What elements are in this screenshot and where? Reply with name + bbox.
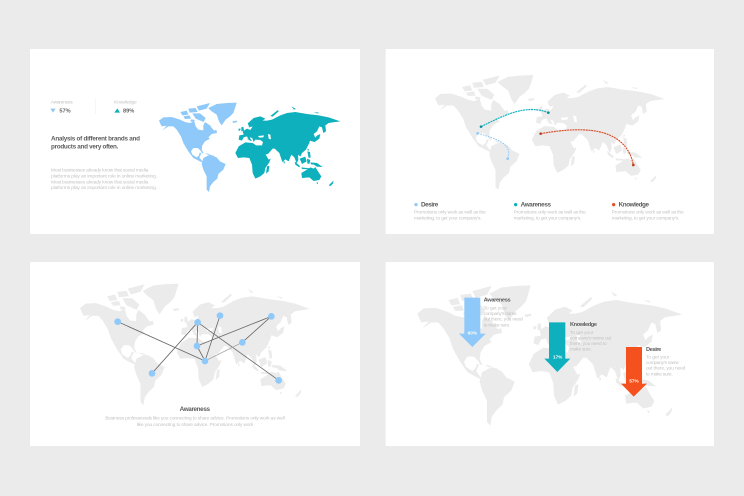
route: knowledge bbox=[539, 130, 635, 166]
arrow: knowledge bbox=[544, 322, 570, 372]
label: awareness: to make sure. bbox=[484, 322, 510, 328]
label: desire: company's name bbox=[646, 360, 679, 366]
stat: knowledge: 89% bbox=[123, 109, 134, 115]
panel: arrows bbox=[386, 262, 714, 446]
body text: Business professionals like you connecting to share advice. Promotions only work as well bbox=[105, 415, 285, 421]
legend: knowledge: Knowledge bbox=[619, 202, 649, 209]
legend: awareness: Promotions only work as well as the bbox=[514, 210, 586, 216]
arrow: awareness bbox=[459, 298, 486, 347]
arrow: desire: 57% bbox=[629, 379, 640, 384]
legend: knowledge: Promotions only work as well as the bbox=[612, 210, 684, 216]
network lines bbox=[118, 316, 279, 380]
legend: desire: marketing, to get your company's. bbox=[414, 216, 482, 222]
label: awareness: To get your bbox=[484, 306, 507, 312]
label: awareness: Awareness bbox=[484, 298, 511, 304]
heading: products and very often. bbox=[51, 143, 119, 150]
network nodes bbox=[114, 312, 282, 384]
label: desire bbox=[646, 347, 686, 378]
label: desire: Desire bbox=[646, 347, 661, 353]
body text: Most businesses already know that social media bbox=[51, 168, 149, 174]
route: desire bbox=[476, 132, 509, 160]
legend: awareness: marketing, to get your company's. bbox=[514, 216, 581, 222]
label: knowledge: make sure. bbox=[570, 347, 592, 353]
legend: knowledge: marketing, to get your company's. bbox=[612, 216, 679, 222]
label: awareness: company's name bbox=[484, 311, 517, 317]
panel: flow routes bbox=[386, 49, 714, 234]
world map bbox=[80, 284, 310, 405]
world map: Americas blue, rest teal bbox=[159, 103, 340, 192]
label: awareness bbox=[484, 298, 523, 328]
stat: awareness bbox=[50, 100, 73, 115]
label: knowledge: there, you need to bbox=[570, 341, 607, 347]
stat: knowledge: Knowledge bbox=[114, 100, 137, 106]
legend: desire: Desire bbox=[421, 202, 439, 209]
label: knowledge: Knowledge bbox=[570, 322, 597, 328]
arrow: desire bbox=[621, 347, 647, 397]
panel: network bbox=[30, 262, 360, 446]
world map bbox=[417, 285, 682, 426]
panel: regional map split bbox=[30, 49, 360, 234]
body text: Most businesses already know that social media bbox=[51, 179, 149, 185]
label: desire: out there, you need bbox=[646, 366, 686, 372]
heading: Awareness bbox=[180, 406, 210, 413]
legend: desire: Promotions only work as well as the bbox=[414, 210, 486, 216]
label: awareness: out there, you need bbox=[484, 317, 523, 323]
arrow: awareness: 60% bbox=[468, 331, 478, 336]
legend: awareness: Awareness bbox=[521, 202, 551, 209]
body text: platforms play an important role in online marketing. bbox=[51, 185, 157, 191]
label: knowledge: To get your bbox=[570, 330, 594, 336]
legend: awareness bbox=[514, 202, 586, 222]
legend: desire bbox=[414, 202, 486, 222]
legend: knowledge bbox=[612, 202, 684, 222]
stat: knowledge bbox=[114, 100, 137, 115]
label: desire: to make sure. bbox=[646, 372, 673, 378]
stat: awareness: 57% bbox=[59, 109, 71, 115]
body text: platforms play an important role in online marketing. bbox=[51, 173, 157, 179]
stat: awareness: Awareness bbox=[51, 100, 73, 106]
label: knowledge: company's name out bbox=[570, 335, 612, 341]
body text: like you connecting to share advice. Promotions only work bbox=[137, 422, 254, 428]
arrow: knowledge: 17% bbox=[553, 354, 563, 359]
heading: Analysis of different brands and bbox=[51, 136, 140, 143]
label: knowledge bbox=[570, 322, 612, 353]
world map bbox=[435, 75, 665, 190]
route: awareness bbox=[480, 110, 550, 128]
label: desire: To get your bbox=[646, 355, 670, 361]
